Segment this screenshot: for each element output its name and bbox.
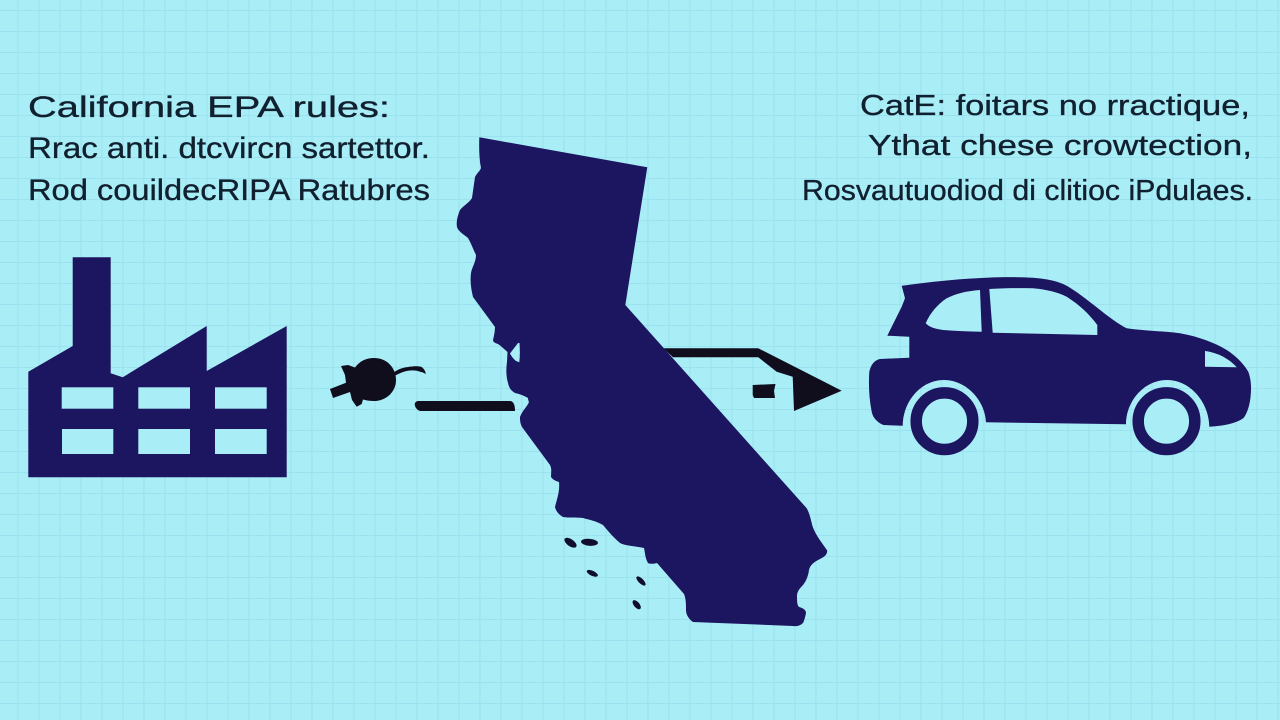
headlight [1205,351,1237,367]
map: California [457,137,827,626]
front window [989,288,1097,335]
car body [869,277,1251,427]
text block: right [802,90,1253,207]
text block: left California EPA rules [28,91,430,207]
arrow fragment [753,384,776,398]
text block: right: Rosvautuodiod di clitioc iPdulaes. [802,175,1253,207]
channel islands [563,536,647,611]
icon: car [869,277,1251,450]
left line 1: California EPA rules: [28,91,390,124]
right line 1: CatE: foitars no rractique, [860,90,1250,122]
bay inlet [510,343,520,362]
front wheel [1138,393,1195,450]
connector bar: left [415,401,515,411]
text block: left California EPA rules: Rrac anti. dtcvircn sartettor. [28,132,430,165]
rear window [926,290,982,332]
text block: left California EPA rules: Rod couildecRIPA Ratubres [28,174,430,207]
arrow: pointing to car [663,348,842,411]
icon: factory [28,257,287,477]
rear wheel [916,393,973,450]
icon: plug [330,358,426,407]
text block: right: Ythat chese crowtection, [868,130,1252,162]
